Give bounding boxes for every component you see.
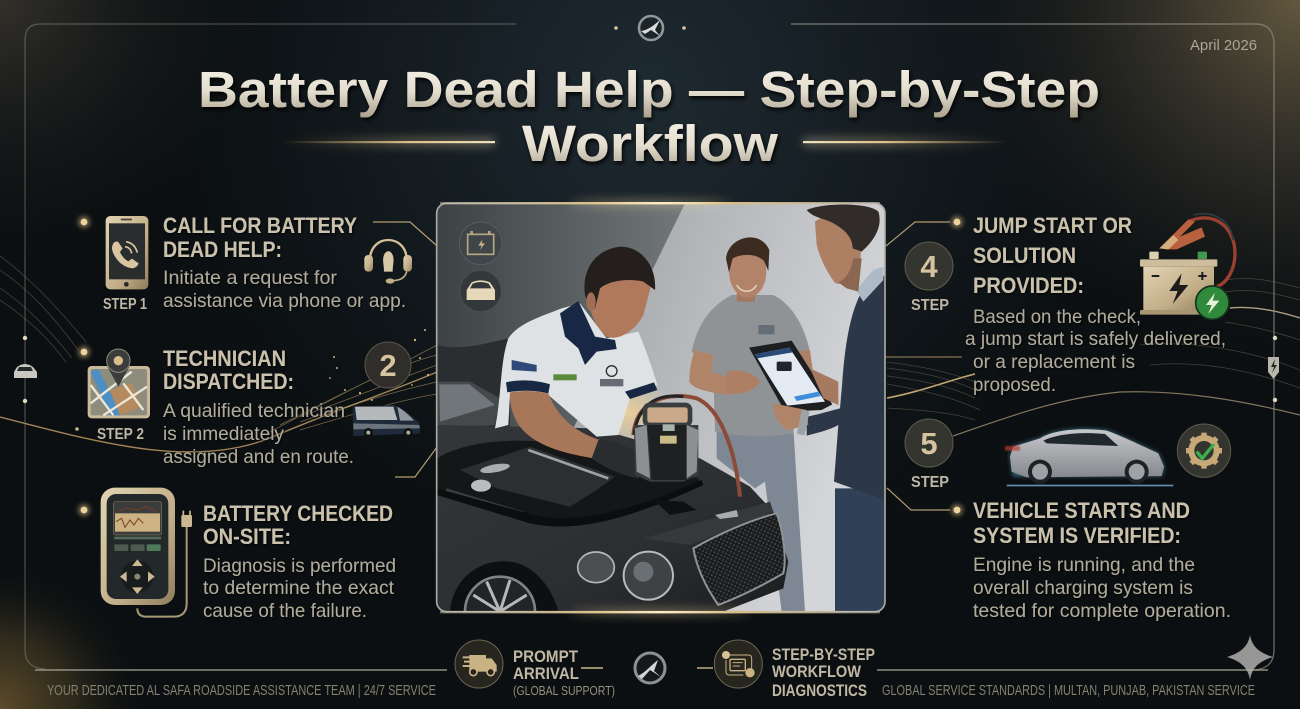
body text: Diagnosis is performed (203, 555, 396, 577)
icon: phone (106, 216, 148, 289)
panel: step 4 (905, 213, 1235, 396)
right connector lines (886, 222, 950, 510)
body text: is immediately (163, 423, 284, 445)
label: (GLOBAL SUPPORT) (513, 684, 615, 698)
icon: battery badge (459, 222, 502, 265)
side ornaments right (1268, 336, 1279, 402)
heading: BATTERY CHECKED (203, 501, 393, 526)
heading: DEAD HELP: (163, 237, 282, 262)
panel: step 2 (78, 342, 420, 468)
title: Battery Dead Help — Step-by-Step (198, 61, 1100, 118)
icon: battery with jumper cables (1140, 214, 1235, 319)
icon: map pin (88, 349, 150, 418)
step number 4: 4 (920, 249, 938, 284)
car grille (693, 513, 785, 605)
step number 5 (905, 419, 953, 467)
sparkle watermark (1227, 635, 1273, 680)
icon: headset (364, 240, 412, 284)
label (513, 647, 615, 698)
title: Workflow (522, 115, 778, 172)
flowing light lines (0, 256, 1300, 452)
step number 2 (365, 342, 411, 388)
title accent lines (282, 138, 1007, 146)
body text: Initiate a request for (163, 267, 338, 289)
label: DIAGNOSTICS (772, 681, 867, 700)
footer connectors (581, 667, 713, 669)
top logo emblem (614, 16, 686, 40)
car body (437, 382, 788, 612)
body text (203, 555, 396, 622)
icon: gold dot (78, 504, 90, 516)
body text: a jump start is safely delivered, (965, 328, 1226, 350)
icon: gold dot (78, 346, 90, 358)
heading: CALL FOR BATTERY (163, 213, 357, 238)
photo light beams (440, 200, 880, 614)
body text: cause of the failure. (203, 600, 367, 622)
panel: step 1 (78, 213, 412, 313)
heading: TECHNICIAN (163, 346, 286, 371)
step label: STEP (911, 297, 949, 314)
heading (203, 501, 393, 549)
particles near step 2 (329, 329, 429, 401)
label: WORKFLOW (772, 662, 862, 681)
body text: proposed. (973, 374, 1056, 396)
step number 5: 5 (920, 426, 938, 461)
step label: STEP 2 (97, 426, 144, 443)
icon: workflow checklist (714, 640, 762, 688)
footer: prompt arrival badge (455, 640, 615, 698)
footer: workflow diagnostics badge (714, 640, 875, 700)
step label: STEP (911, 474, 949, 491)
jump starter (633, 396, 740, 497)
car headlights (578, 552, 673, 600)
heading: SOLUTION (973, 243, 1076, 268)
label: ARRIVAL (513, 664, 579, 683)
right man (807, 204, 885, 612)
icon: car badge (460, 270, 501, 312)
body text: Engine is running, and the (973, 554, 1195, 576)
step number 4 (905, 242, 953, 290)
heading: JUMP START OR (973, 213, 1132, 238)
heading: DISPATCHED: (163, 369, 294, 394)
photo border (437, 203, 885, 612)
step number 2: 2 (379, 348, 397, 383)
heading (973, 498, 1190, 548)
body text (965, 306, 1226, 396)
body text: A qualified technician (163, 400, 345, 422)
panel: step 5 (905, 419, 1231, 622)
panel: step 3 (78, 488, 396, 622)
label: STEP-BY-STEP (772, 645, 875, 664)
body text: or a replacement is (973, 351, 1135, 373)
central illustration: technician jump-starting a car (437, 203, 885, 647)
heading: PROVIDED: (973, 273, 1084, 298)
heading: ON-SITE: (203, 524, 291, 549)
heading (163, 346, 294, 394)
label (772, 645, 875, 700)
heading (973, 213, 1132, 298)
left connector lines (373, 222, 437, 477)
body text: overall charging system is (973, 577, 1193, 599)
body text: assigned and en route. (163, 446, 354, 468)
label: PROMPT (513, 647, 579, 666)
body text: assistance via phone or app. (163, 290, 406, 312)
photo backdrop (437, 203, 885, 612)
body text (973, 554, 1231, 622)
step label: STEP 1 (103, 296, 147, 313)
icon: service van (353, 405, 420, 437)
heading: VEHICLE STARTS AND (973, 498, 1190, 523)
date label: April 2026 (1190, 38, 1257, 54)
body text: Based on the check, (973, 306, 1141, 328)
icon: gold dot (78, 216, 90, 228)
side ornaments left (14, 336, 79, 431)
title (198, 61, 1100, 172)
icon: car (1005, 429, 1173, 486)
tablet (749, 341, 838, 436)
technician (495, 247, 657, 478)
heading (163, 213, 357, 262)
body text (163, 267, 406, 312)
body text (163, 400, 354, 468)
body text: tested for complete operation. (973, 600, 1231, 622)
icon: gear check (1177, 424, 1231, 477)
car wheel (450, 561, 558, 611)
icon: gold dot (951, 216, 963, 228)
footer logo emblem (635, 653, 665, 683)
icon: gold dot (951, 504, 963, 516)
icon: battery diagnostic device (101, 488, 192, 617)
footer text left: YOUR DEDICATED AL SAFA ROADSIDE ASSISTANCE TEAM | 24/7 SERVICE (47, 683, 436, 699)
heading: SYSTEM IS VERIFIED: (973, 523, 1181, 548)
body text: to determine the exact (203, 577, 395, 599)
icon: delivery truck (455, 640, 503, 688)
middle man (689, 237, 813, 612)
